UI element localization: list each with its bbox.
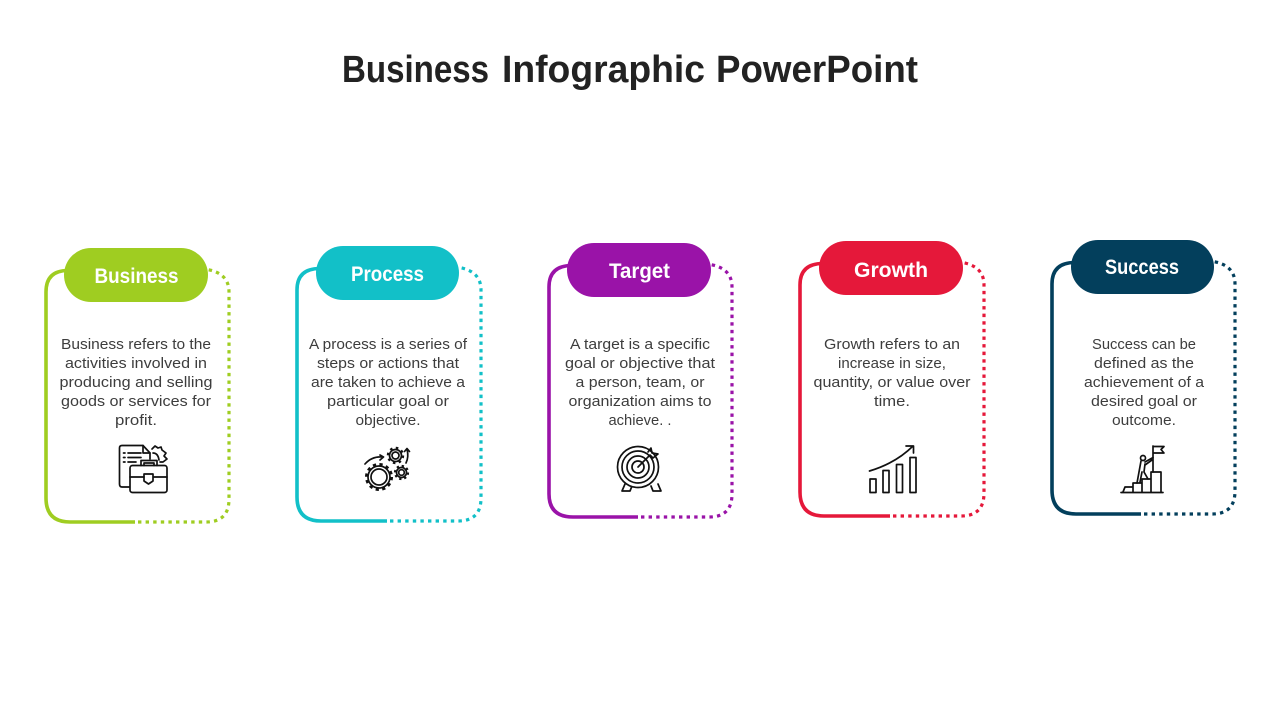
text: growth: time. (874, 393, 910, 410)
title (342, 49, 918, 91)
title: Business (342, 49, 489, 91)
panel: success (1052, 240, 1235, 514)
icon: gears (365, 448, 410, 490)
text: target: A target is a specific (570, 336, 711, 353)
text: growth: increase in size, (838, 355, 946, 372)
icon: rising bar chart (870, 446, 916, 492)
text: target: achieve. . (608, 412, 672, 429)
text: process: A process is a series of (309, 336, 468, 353)
text: success: desired goal or (1091, 393, 1197, 410)
card outline: target (549, 264, 732, 517)
text: process: objective. (356, 412, 420, 429)
panel: growth (800, 241, 984, 516)
text: success (1084, 336, 1205, 429)
title: Infographic (502, 49, 705, 91)
text: business: activities involved in (65, 355, 207, 372)
text: business: producing and selling (60, 374, 212, 391)
text: success: Success can be (1092, 336, 1196, 353)
text: process: steps or actions that (317, 355, 460, 372)
panel: process (297, 246, 481, 521)
heading: target: Target (609, 260, 670, 283)
icon: target with arrow (618, 446, 661, 491)
text: process: are taken to achieve a (311, 374, 466, 391)
text: success: outcome. (1112, 412, 1176, 429)
heading: process: Process (351, 263, 424, 286)
card outline: process (297, 267, 481, 521)
text: process (309, 336, 468, 429)
text: success: achievement of a (1084, 374, 1205, 391)
text: growth (814, 336, 970, 410)
icon: person climbing steps to flag (1121, 446, 1164, 492)
panel: business (46, 248, 229, 522)
card outline: business (46, 269, 229, 522)
text: target (565, 336, 716, 429)
pill: process (316, 246, 459, 300)
text: growth: quantity, or value over (814, 374, 970, 391)
text: success: defined as the (1094, 355, 1194, 372)
pill: business (64, 248, 208, 302)
icon: document, gear and briefcase (120, 446, 167, 492)
card outline: success (1052, 261, 1235, 514)
heading: success: Success (1105, 256, 1179, 279)
heading: growth: Growth (854, 259, 928, 282)
heading: business: Business (94, 265, 178, 288)
text: target: a person, team, or (576, 374, 704, 391)
title: PowerPoint (716, 49, 918, 91)
text: process: particular goal or (327, 393, 449, 410)
text: growth: Growth refers to an (824, 336, 960, 353)
text: business: profit. (115, 412, 157, 429)
text: business: Business refers to the (61, 336, 211, 353)
text: business: goods or services for (61, 393, 211, 410)
panel: target (549, 243, 732, 517)
text: target: goal or objective that (565, 355, 716, 372)
pill: growth (819, 241, 963, 295)
pill: success (1071, 240, 1214, 294)
text: target: organization aims to (568, 393, 712, 410)
card outline: growth (800, 262, 984, 516)
pill: target (567, 243, 711, 297)
text: business (60, 336, 212, 429)
